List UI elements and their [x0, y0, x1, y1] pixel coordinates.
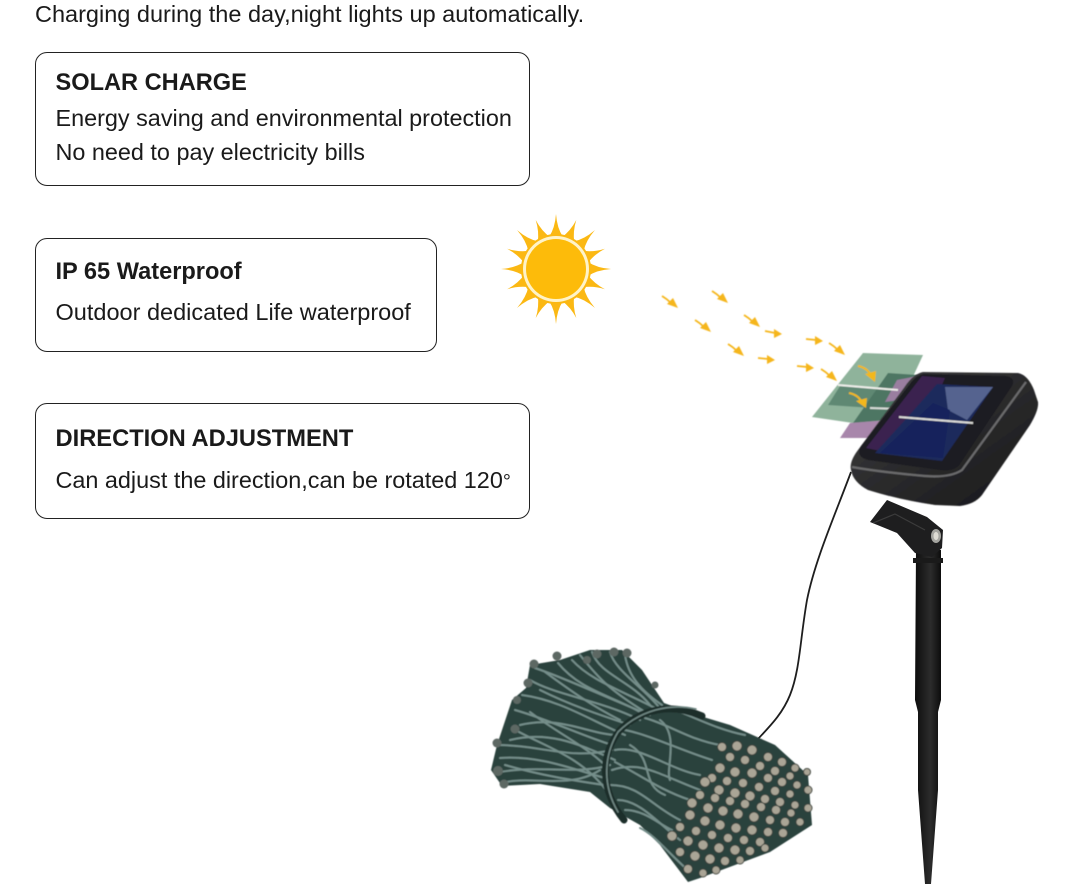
solar panel film layers — [812, 353, 927, 438]
icon: sun — [501, 214, 611, 324]
cable — [758, 472, 851, 739]
solar panel housing — [851, 372, 1038, 506]
panel: direction adjustment — [35, 403, 530, 519]
LED bulbs far end — [492, 648, 658, 788]
arrows: sun rays — [662, 291, 845, 381]
heading text: Charging during the day,night lights up automatically. — [35, 1, 584, 27]
heading: solar charge: SOLAR CHARGE — [56, 70, 247, 96]
bracket — [870, 500, 943, 557]
text: solar charge details: Energy saving and environmental protection — [56, 105, 512, 131]
text: direction details: Can adjust the direction,can be rotated 120° — [56, 467, 511, 493]
panel: solar charge — [35, 52, 530, 186]
heading: direction adjustment: DIRECTION ADJUSTMENT — [56, 426, 353, 452]
heading: waterproof: IP 65 Waterproof — [56, 259, 242, 285]
wrap band — [605, 707, 702, 820]
text: solar charge details: No need to pay electricity bills — [56, 139, 365, 165]
bundle mass — [491, 650, 812, 882]
light string bundle — [491, 648, 812, 882]
LED bulbs near end — [667, 741, 812, 877]
panel: waterproof — [35, 238, 437, 352]
arrows: on solar film — [849, 366, 876, 408]
wires — [497, 652, 745, 872]
solar panel glass — [859, 374, 1013, 470]
text: solar charge details — [56, 105, 512, 165]
text: waterproof details: Outdoor dedicated Life waterproof — [56, 299, 411, 325]
stake — [913, 550, 943, 884]
